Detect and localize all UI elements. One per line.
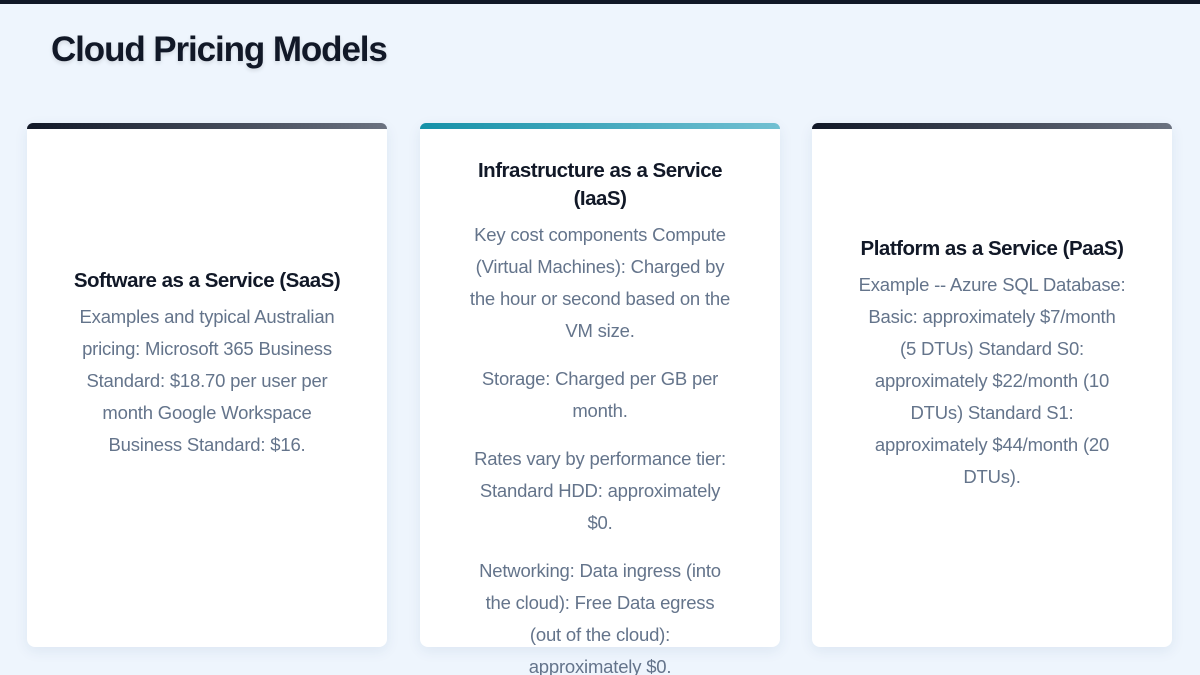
IaaS text: Storage: Charged per GB per xyxy=(482,368,718,389)
PaaS text xyxy=(859,237,1125,487)
IaaS text: Key cost components Compute xyxy=(474,224,726,245)
IaaS text xyxy=(470,159,730,675)
IaaS text: month. xyxy=(572,400,628,421)
IaaS text: VM size. xyxy=(565,320,635,341)
SaaS text: pricing: Microsoft 365 Business xyxy=(82,338,332,359)
PaaS text: (5 DTUs) Standard S0: xyxy=(900,338,1084,359)
PaaS text: Basic: approximately $7/month xyxy=(868,306,1116,327)
SaaS text: month Google Workspace xyxy=(102,402,312,423)
PaaS text: DTUs) Standard S1: xyxy=(911,402,1073,423)
panel: IaaS xyxy=(420,123,780,647)
PaaS text: DTUs). xyxy=(963,466,1021,487)
SaaS text: Business Standard: $16. xyxy=(108,434,305,455)
PaaS text: Example -- Azure SQL Database: xyxy=(859,274,1125,295)
IaaS text: Infrastructure as a Service xyxy=(478,159,722,182)
IaaS text: Networking: Data ingress (into xyxy=(479,560,721,581)
SaaS text xyxy=(74,269,340,455)
IaaS text: (out of the cloud): xyxy=(530,624,670,645)
IaaS text: the cloud): Free Data egress xyxy=(486,592,714,613)
PaaS text: approximately $44/month (20 xyxy=(875,434,1109,455)
IaaS text: the hour or second based on the xyxy=(470,288,730,309)
SaaS text: Standard: $18.70 per user per xyxy=(86,370,328,391)
panel: SaaS xyxy=(27,123,387,647)
IaaS text: (Virtual Machines): Charged by xyxy=(476,256,724,277)
title: Cloud Pricing Models xyxy=(51,30,387,69)
PaaS text: approximately $22/month (10 xyxy=(875,370,1109,391)
SaaS text: Software as a Service (SaaS) xyxy=(74,269,340,292)
IaaS text: Standard HDD: approximately xyxy=(480,480,720,501)
PaaS text: Platform as a Service (PaaS) xyxy=(861,237,1123,260)
IaaS text: $0. xyxy=(587,512,613,533)
SaaS text: Examples and typical Australian xyxy=(80,306,334,327)
panel: PaaS xyxy=(812,123,1172,647)
IaaS text: Rates vary by performance tier: xyxy=(474,448,726,469)
IaaS text: (IaaS) xyxy=(574,187,626,210)
